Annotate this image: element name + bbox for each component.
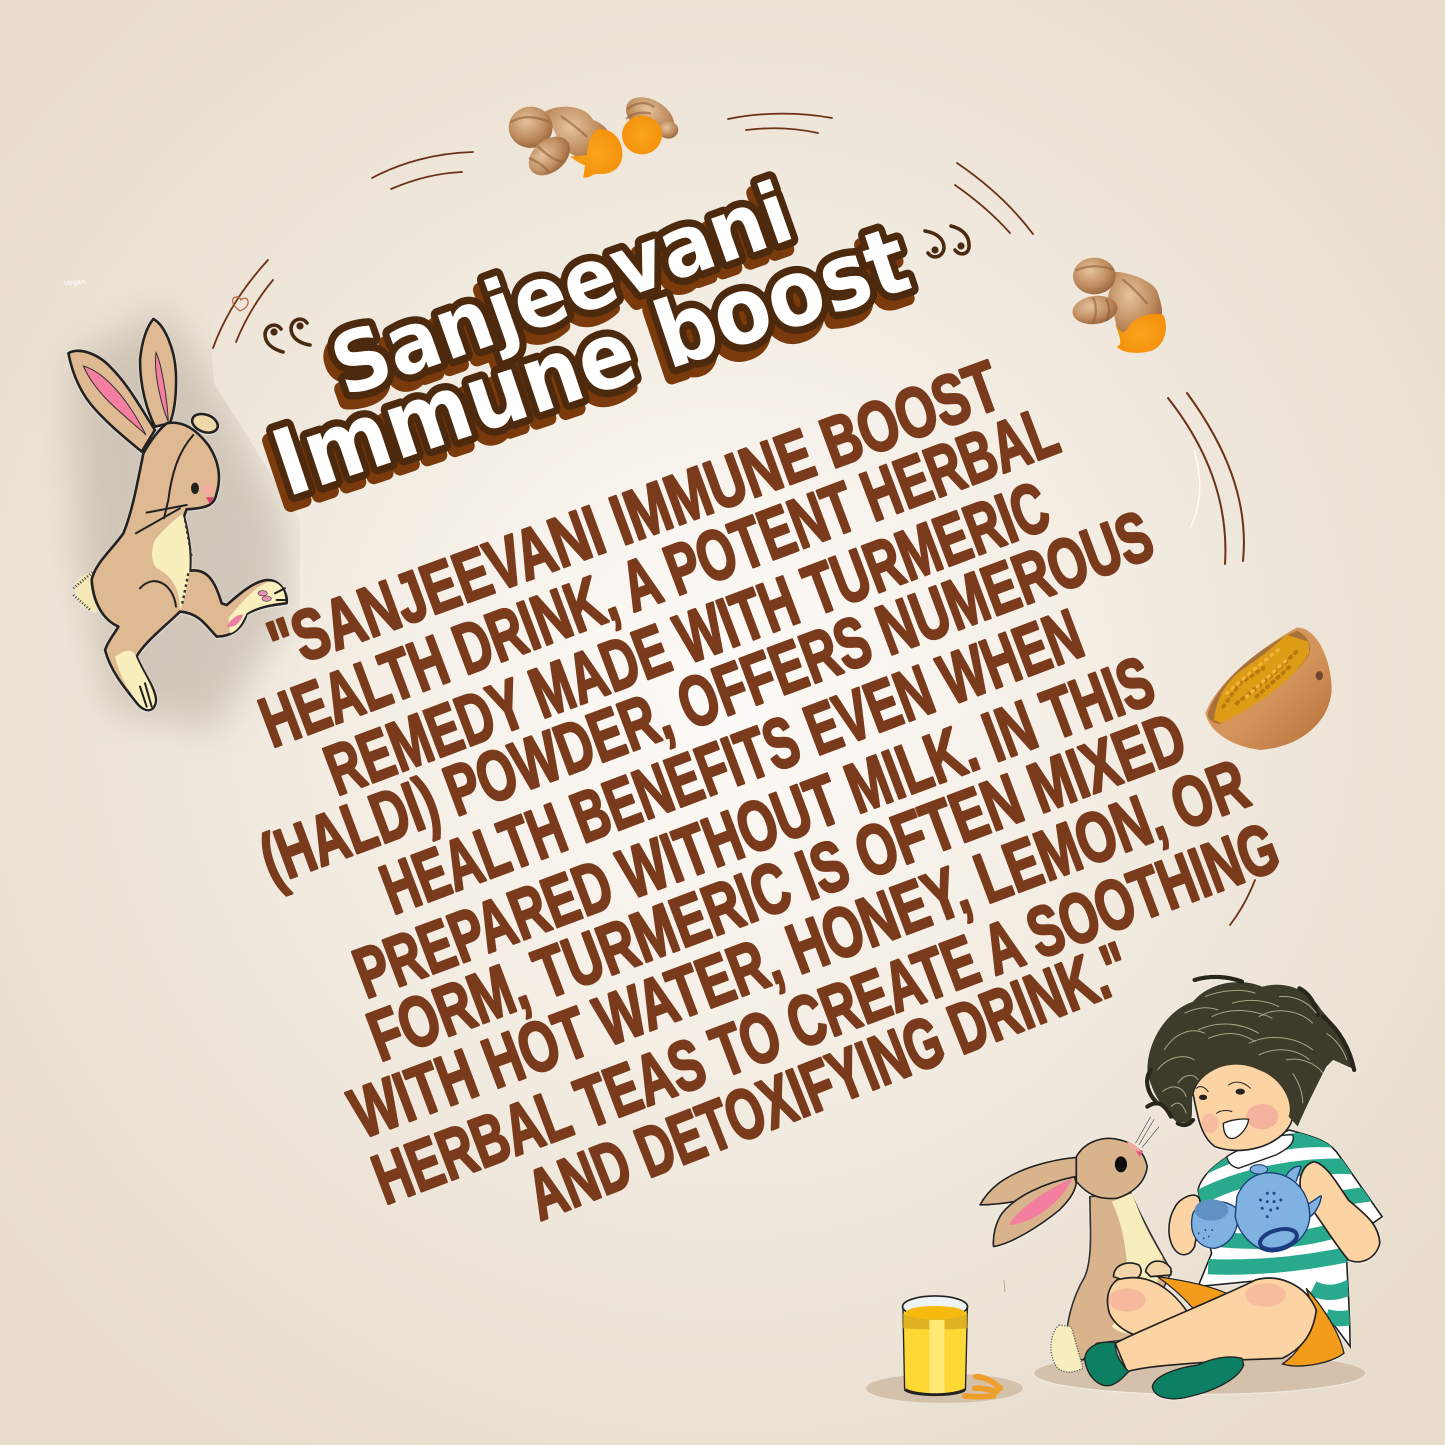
rabbit chest and foot highlights [152, 514, 190, 610]
icon: closing quote [925, 226, 969, 257]
title: Immune boost [260, 206, 922, 518]
rabbit tail [73, 572, 97, 612]
child collar, face and hair [1147, 977, 1354, 1168]
body text: HEALTH DRINK, A POTENT HERBAL [250, 392, 1069, 763]
body text: REMEDY MADE WITH TURMERIC [315, 468, 1060, 811]
illustration: child and rabbit having tea [980, 977, 1382, 1399]
title: Sanjeevani [319, 163, 804, 416]
rabbit body [92, 423, 287, 710]
teapot [1235, 1165, 1321, 1253]
child arms and hands [1169, 1162, 1380, 1262]
body text: "SANJEEVANI IMMUNE BOOST [258, 347, 1010, 686]
body text: HEALTH BENEFITS EVEN WHEN [371, 595, 1093, 930]
child legs and socks [1085, 1278, 1316, 1399]
sitting rabbit [980, 1117, 1172, 1372]
body text [250, 347, 1289, 1236]
rabbit details [136, 411, 286, 707]
ground shadow [1034, 1353, 1365, 1394]
child hair [1147, 977, 1354, 1127]
illustration: glass of golden drink [866, 1296, 1023, 1403]
icon: turmeric roots top [509, 89, 681, 183]
illustration: jumping rabbit [68, 319, 287, 710]
icon: opening quote [265, 319, 310, 352]
child shirt [1198, 1130, 1382, 1347]
child shorts [1157, 1277, 1344, 1366]
icon: turmeric root right [1071, 258, 1166, 353]
glass [903, 1307, 967, 1395]
small white label: Vegan: Vegan [63, 277, 85, 288]
decorative swoosh arcs [213, 114, 1255, 1292]
glass shadow [866, 1374, 1023, 1403]
body text: AND DETOXIFYING DRINK." [517, 928, 1141, 1236]
shadow behind left rabbit [70, 310, 290, 730]
turmeric pieces [965, 1377, 1000, 1397]
teacup [1192, 1199, 1238, 1248]
rabbit ears [68, 319, 176, 452]
icon: wooden bowl of turmeric powder [1205, 628, 1332, 750]
